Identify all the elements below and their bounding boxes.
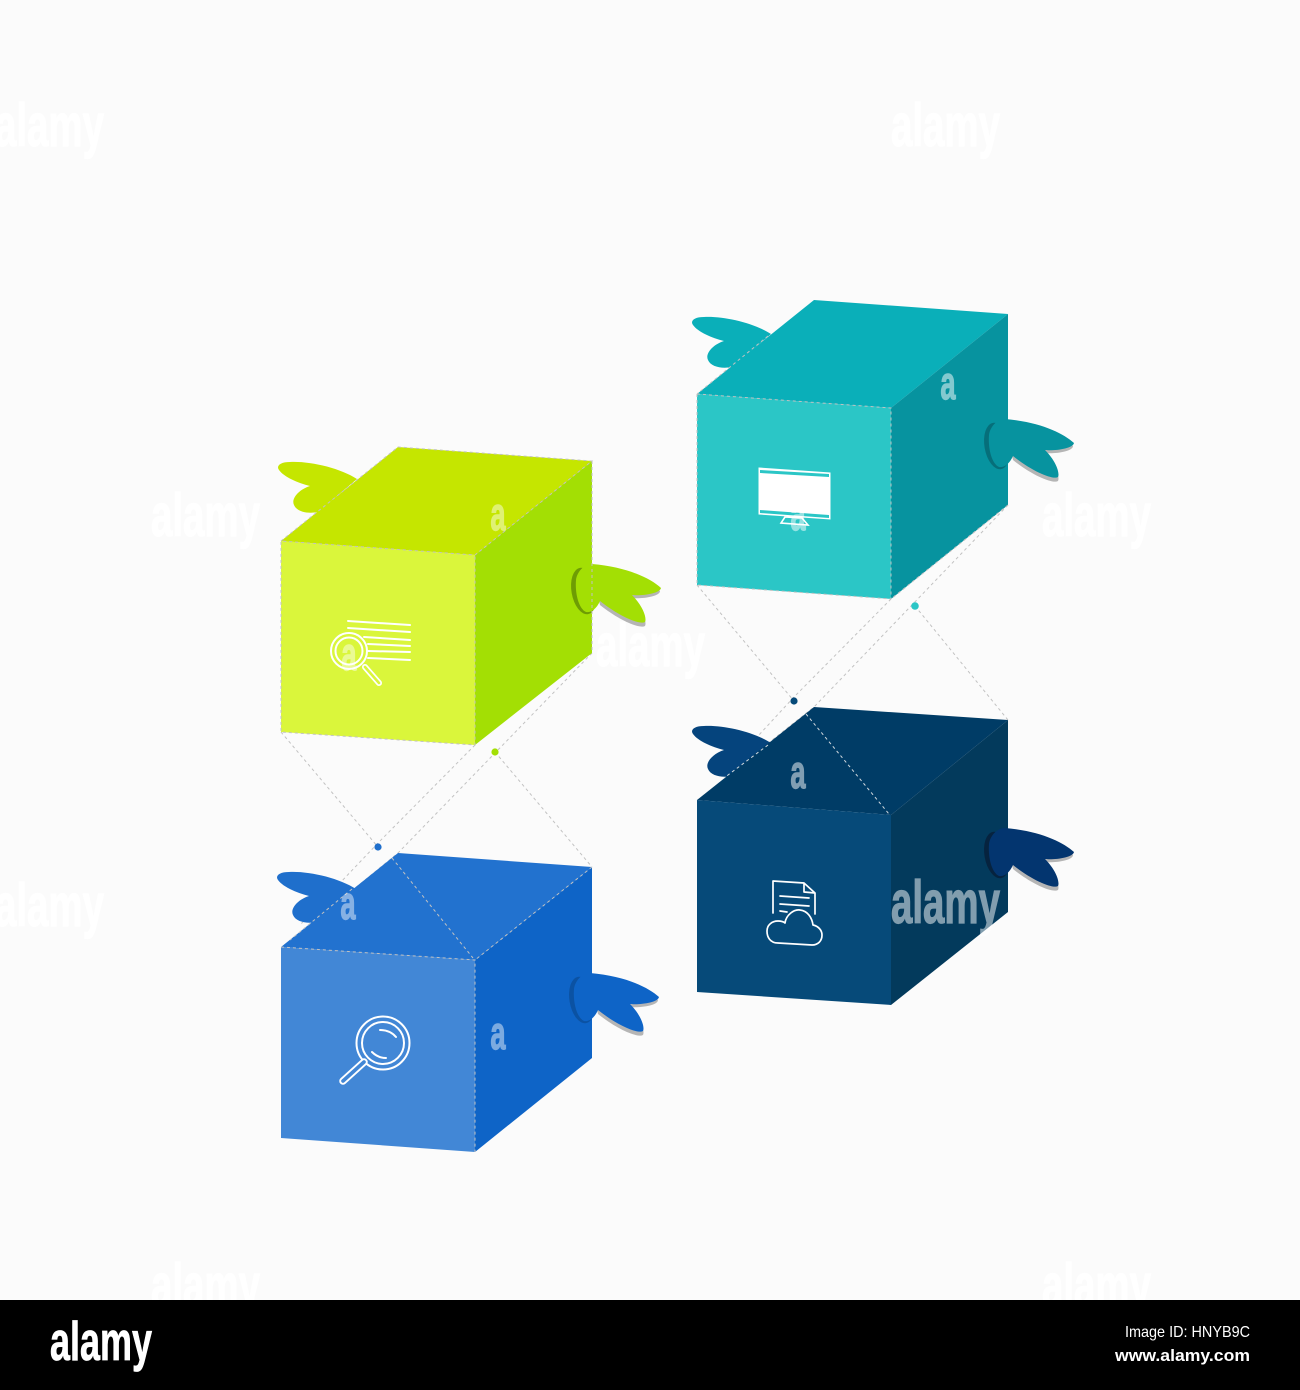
background watermarks: alamy	[891, 92, 1000, 159]
watermark letters: blue: a	[340, 877, 356, 929]
front face: navy	[697, 800, 891, 1005]
background watermarks: alamy	[0, 92, 104, 159]
icon: magnifying glass	[343, 1016, 410, 1081]
footer image id: Image ID: HNYB9C	[1125, 1324, 1250, 1341]
box: blue	[277, 853, 659, 1152]
front face: green	[281, 541, 475, 745]
top face: teal	[697, 300, 1008, 408]
watermark letters: navy: a	[790, 746, 806, 798]
box edges: blue	[281, 858, 592, 1152]
right wing: green	[568, 564, 661, 623]
box edges: green	[281, 447, 592, 745]
watermark letters: navy: alamy	[891, 869, 1000, 936]
top face: green	[281, 447, 592, 555]
icon: document search	[331, 621, 410, 683]
icon: cloud document	[767, 881, 822, 945]
right face: green	[475, 461, 592, 745]
background watermarks	[0, 92, 1151, 1319]
connector lines: green to blue	[281, 653, 592, 925]
icon: monitor	[759, 468, 830, 525]
footer bar	[0, 1300, 1300, 1390]
box: green	[278, 447, 661, 745]
right wing: navy	[981, 828, 1074, 887]
watermark letters: teal: a	[790, 488, 806, 540]
right wing shadow: navy	[1005, 832, 1073, 891]
left wing: teal	[692, 317, 771, 368]
left wing: navy	[692, 726, 771, 777]
background watermarks: alamy	[1042, 1252, 1151, 1319]
right wing shadow: green	[592, 568, 660, 627]
watermark letters: teal: a	[940, 357, 956, 409]
front face: teal	[697, 394, 891, 599]
top face: blue	[281, 853, 592, 960]
right face: blue	[475, 867, 592, 1152]
background watermarks: alamy	[151, 482, 260, 549]
box edges: navy	[724, 714, 889, 814]
box: teal	[692, 300, 1074, 599]
right wing: blue	[566, 973, 659, 1032]
right wing: teal	[981, 419, 1074, 478]
background watermarks: alamy	[0, 872, 104, 939]
left wing: blue	[277, 872, 356, 923]
watermark letters: navy	[790, 746, 1000, 936]
left wing: green	[278, 462, 357, 513]
background watermarks: alamy	[151, 1252, 260, 1319]
footer website: www.alamy.com	[1114, 1346, 1250, 1365]
right face: teal	[891, 314, 1008, 599]
box: navy	[692, 707, 1074, 1005]
box edges: teal	[697, 336, 1008, 599]
watermark letters: teal	[790, 357, 956, 540]
right wing shadow: blue	[590, 977, 658, 1036]
watermark letters: green: a	[342, 628, 357, 680]
footer logo: alamy	[50, 1310, 152, 1372]
watermark letters: blue	[340, 877, 506, 1059]
watermark letters: green	[342, 488, 506, 680]
right wing shadow: teal	[1005, 423, 1073, 482]
watermark letters: green: a	[490, 488, 506, 540]
watermark letters: blue: a	[490, 1007, 506, 1059]
front face: blue	[281, 947, 475, 1152]
connector lines: teal to navy	[697, 505, 1008, 778]
background watermarks: alamy	[596, 612, 705, 679]
background watermarks: alamy	[1042, 482, 1151, 549]
top face: navy	[697, 707, 1008, 815]
connector dots	[374, 602, 919, 851]
right face: navy	[891, 720, 1008, 1005]
